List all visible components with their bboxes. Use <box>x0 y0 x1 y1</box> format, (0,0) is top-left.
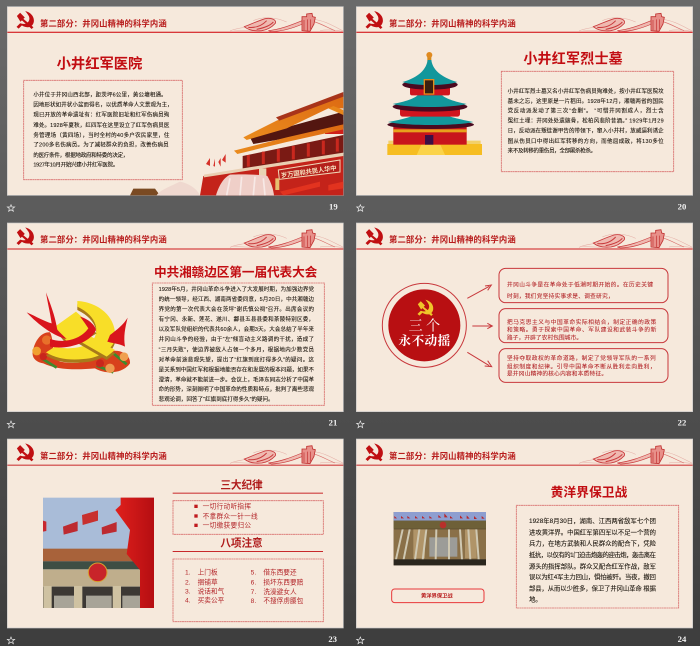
text panel <box>24 80 182 180</box>
text panel: 界党的第一次代表大会在茨坪“谢氏慎公祠”召开。出席会议的 <box>159 305 315 313</box>
star icon <box>357 421 364 428</box>
card 3: 是井冈山精神的核心内容和本质特征。 <box>507 370 607 378</box>
arrow right <box>472 323 492 329</box>
slide title: 小井红军烈士墓 <box>523 50 623 66</box>
slide 23: 三大纪律 八项注意 <box>7 439 343 644</box>
slide title: 中共湘赣边区第一届代表大会 <box>154 265 318 280</box>
great wall ornament <box>230 446 343 464</box>
list panel: three rules: 一切行动听指挥 <box>203 502 251 511</box>
text panel: 源头的指挥部队。群众又配合红军作战，敌军 <box>529 561 656 570</box>
text panel <box>501 71 674 172</box>
red ribbon <box>27 292 67 339</box>
list panel: three rules: 不拿群众一针一线 <box>203 511 258 520</box>
great wall ornament <box>230 230 343 248</box>
caption button: 黄洋界保卫战 <box>421 592 453 600</box>
text panel: 兵力，在地方武装和人民群众的配合下，凭险 <box>529 539 657 548</box>
text panel: 图从伤员口中得出红军转移的方向，而他屈成敌，将130多位 <box>508 137 664 145</box>
text panel: 的医疗条件，根据地政府和特委的决定， <box>33 151 128 159</box>
slide 22: 三个永不动摇 <box>356 223 693 428</box>
text panel: 务管理场（黄四场），当时全村的40多户农民家里，住 <box>33 131 170 139</box>
heading: 三大纪律: 三大纪律 <box>220 478 263 491</box>
text panel: 日，反动派在叛徒谢甲告的带领下，窜入小井村，放威逼利诱企 <box>508 127 664 135</box>
plaque <box>278 160 340 179</box>
flags <box>206 154 226 167</box>
text panel: 墓未之忘，这里原是一片稻田。1928年12月，湘赣两省的国民 <box>508 97 664 105</box>
slide 20: 小井红军烈士墓 <box>356 7 693 212</box>
slide title: 小井红军医院 <box>57 55 142 73</box>
header title: 第二部分：井冈山精神的科学内涵 <box>40 235 167 245</box>
central circle: 三 个 <box>409 319 440 335</box>
star icon <box>357 205 364 211</box>
text panel: 部县，从而以少胜多，保卫了井冈山革命 根据 <box>529 583 657 592</box>
list panel: eight points: 3. <box>185 588 191 595</box>
text panel: 井冈山斗争的经验，由于“左”倾盲动主义路调的干扰，造成了 <box>159 335 314 343</box>
tiananmen illustration: 岁万国和共民人华中 <box>280 163 337 180</box>
page number: 19 <box>329 202 338 212</box>
page number: 24 <box>678 634 687 644</box>
text panel: 命的形势，深刻阐明了中国革命的性质和特点，批判了离些悲观 <box>159 385 315 393</box>
text panel: 小井位于井冈山西北部，距茨坪6公里，黄公塘相通。 <box>33 91 167 99</box>
text panel: 1928年5月，井冈山革命斗争进入了大发展时期，为加强边界党 <box>159 285 315 293</box>
header title: 第二部分：井冈山精神的科学内涵 <box>389 235 516 245</box>
text panel: 抵抗，以仅有的1门迫击炮轰的迎击炮，轰击离在 <box>529 550 656 559</box>
card 2: 把马克思主义与中国革命实际相结合，制定正确的政策 <box>507 318 657 326</box>
header title: 第二部分：井冈山精神的科学内涵 <box>40 451 167 461</box>
text panel: 悲观论调，回答了“红旗到底打得多久”的疑问。 <box>159 395 274 403</box>
photo: great hall facade <box>394 512 486 565</box>
text panel: 因地形状如井状小盆而得名，以优质革命人文景观为主， <box>33 101 173 109</box>
list panel: three rules: 一切缴获要归公 <box>203 521 251 530</box>
card 2: 路子，开辟了农村包围城市。 <box>507 333 582 341</box>
card 2 <box>499 309 668 343</box>
page number: 20 <box>678 202 686 212</box>
text panel <box>152 283 324 405</box>
header icon <box>17 443 34 461</box>
list panel: eight points: 6. <box>251 580 256 587</box>
card 1 <box>499 268 668 303</box>
header title: 第二部分：井冈山精神的科学内涵 <box>389 451 516 461</box>
header icon <box>366 443 383 461</box>
slide title: 黄洋界保卫战 <box>551 484 628 499</box>
header title: 第二部分：井冈山精神的科学内涵 <box>40 18 167 28</box>
text panel: 是关系到中国红军和根据地能否存在和发展的根本问题，如果不 <box>159 366 315 374</box>
temple of heaven illustration <box>387 52 482 155</box>
star icon <box>7 637 15 644</box>
fountains <box>157 182 200 195</box>
header title: 第二部分：井冈山精神的科学内涵 <box>389 18 516 28</box>
text panel: 1928年8月30日，湖南、江西两省敌军七个团 <box>529 516 656 525</box>
page number: 21 <box>329 418 337 428</box>
great wall ornament <box>579 230 692 248</box>
header icon <box>366 227 383 245</box>
list panel: eight points: 1. <box>185 570 191 577</box>
card 1: 井冈山斗争是在革命处于低潮时期开始的。在历史关键 <box>507 280 653 288</box>
text panel: 来不及转移的重伤员，全部屠杀枪杀。 <box>508 147 596 155</box>
text panel <box>516 505 679 608</box>
list panel: eight points: 买卖公平 <box>198 596 225 604</box>
star icon <box>7 205 15 211</box>
photo: great hall with red flags <box>43 498 154 608</box>
text panel: 党反动派发动了第三次“会剿”。 “可惜井冈割成人，烈士含 <box>508 107 664 115</box>
star icon <box>357 637 364 644</box>
flowers <box>33 332 130 372</box>
slide 19: 小井红军医院 <box>7 7 343 212</box>
text panel: 地。 <box>529 595 542 604</box>
list panel: eight points: 说话和气 <box>198 586 225 595</box>
page number: 22 <box>678 418 686 428</box>
header icon <box>17 227 34 245</box>
text panel: 有宁冈、永新、莲花、遂川、酃县五县县委和茶陵特别区委， <box>159 315 314 323</box>
caption button <box>392 589 484 603</box>
card 2: 和策略。勇于探索中国革命、军队建设和武装斗争的新 <box>507 325 657 333</box>
text panel: 对革命前途悲观失望，提出了“红旗到底打得多久”的疑问。这 <box>159 356 315 364</box>
text panel: 现已开放的革命遗址有：红军医院旧址和红军伤病员殉 <box>33 111 170 119</box>
central circle: 永不动摇 <box>398 333 451 348</box>
text panel: 1927年10月开始兴建小井红军医院。 <box>33 160 118 168</box>
great wall ornament <box>579 446 692 464</box>
list panel: eight points: 2. <box>185 579 191 586</box>
text panel: 澄清，革命就不能前进一步。会议上，毛泽东同志分析了中国革 <box>159 376 315 384</box>
great wall ornament <box>230 13 343 32</box>
text panel: 冤红土埋：井冈处处遗骸骨，松柏风悲阶昔酒。” 1929年1月29 <box>508 117 664 125</box>
text panel: 小井红军烈士墓又名小井红军伤病员殉难处，按小井红军医院坟 <box>508 87 664 95</box>
list panel: eight points: 洗澡避女人 <box>263 587 297 596</box>
central circle <box>382 283 466 367</box>
list panel: eight points: 损坏东西要赔 <box>263 578 304 587</box>
card 3: 坚持夺取政权的革命道路，制定了党领导军队的一系列 <box>507 354 656 362</box>
text panel: “三月失败”，使边界被敌人占领一个多月，根据地内少数党员 <box>159 346 315 354</box>
tiananmen illustration <box>130 92 343 195</box>
list panel: eight points: 7. <box>251 589 256 596</box>
text panel: 了200多名伤病员。为了减轻群众的负担，改善伤病员 <box>33 141 169 149</box>
card 1: 时刻，我们党坚持实事求是、调查研究， <box>507 292 614 300</box>
text panel: 以及军队党组织的代表共60余人，会期3天。大会总结了半年来 <box>159 325 315 333</box>
list panel: eight points: 不搜俘虏腰包 <box>263 596 304 605</box>
list panel: eight points: 捆铺草 <box>198 577 218 586</box>
card 3 <box>499 349 668 382</box>
card 3: 组织制度和纪律。引导中国革命不断从胜利走向胜利， <box>507 362 656 370</box>
great wall ornament <box>579 13 692 32</box>
party emblem illustration <box>27 292 130 373</box>
header icon <box>17 11 34 29</box>
list panel: eight points: 5. <box>251 570 256 577</box>
header icon <box>366 11 383 29</box>
text panel: 误以为红4军主力回山，惧怕被歼。当夜，撤回 <box>529 572 656 581</box>
slide 21: 中共湘赣边区第一届代表大会 <box>7 223 343 428</box>
text panel: 难处。1928年夏秋，红四军在这里设立了红军伤病员医 <box>33 121 170 129</box>
list panel: three rules <box>173 501 323 534</box>
arrow down <box>467 352 492 367</box>
golden sickle and hammer <box>46 304 115 363</box>
slide 24: 黄洋界保卫战 <box>356 439 693 644</box>
text panel: 进攻黄洋界。中国红军第四军以不足一个营的 <box>529 527 656 536</box>
arrow up <box>467 285 491 298</box>
text panel: 的统一领导，经江西、湖南两省委同意，5月20日，中共湘赣边 <box>159 295 315 303</box>
list panel: eight points: 8. <box>251 598 256 605</box>
heading: 八项注意: 八项注意 <box>220 536 263 549</box>
list panel: eight points: 上门板 <box>198 568 218 577</box>
list panel: eight points <box>173 559 323 622</box>
list panel: eight points: 4. <box>185 597 191 604</box>
star icon <box>7 421 15 428</box>
page number: 23 <box>328 634 338 644</box>
list panel: eight points: 借东西要还 <box>263 568 297 577</box>
